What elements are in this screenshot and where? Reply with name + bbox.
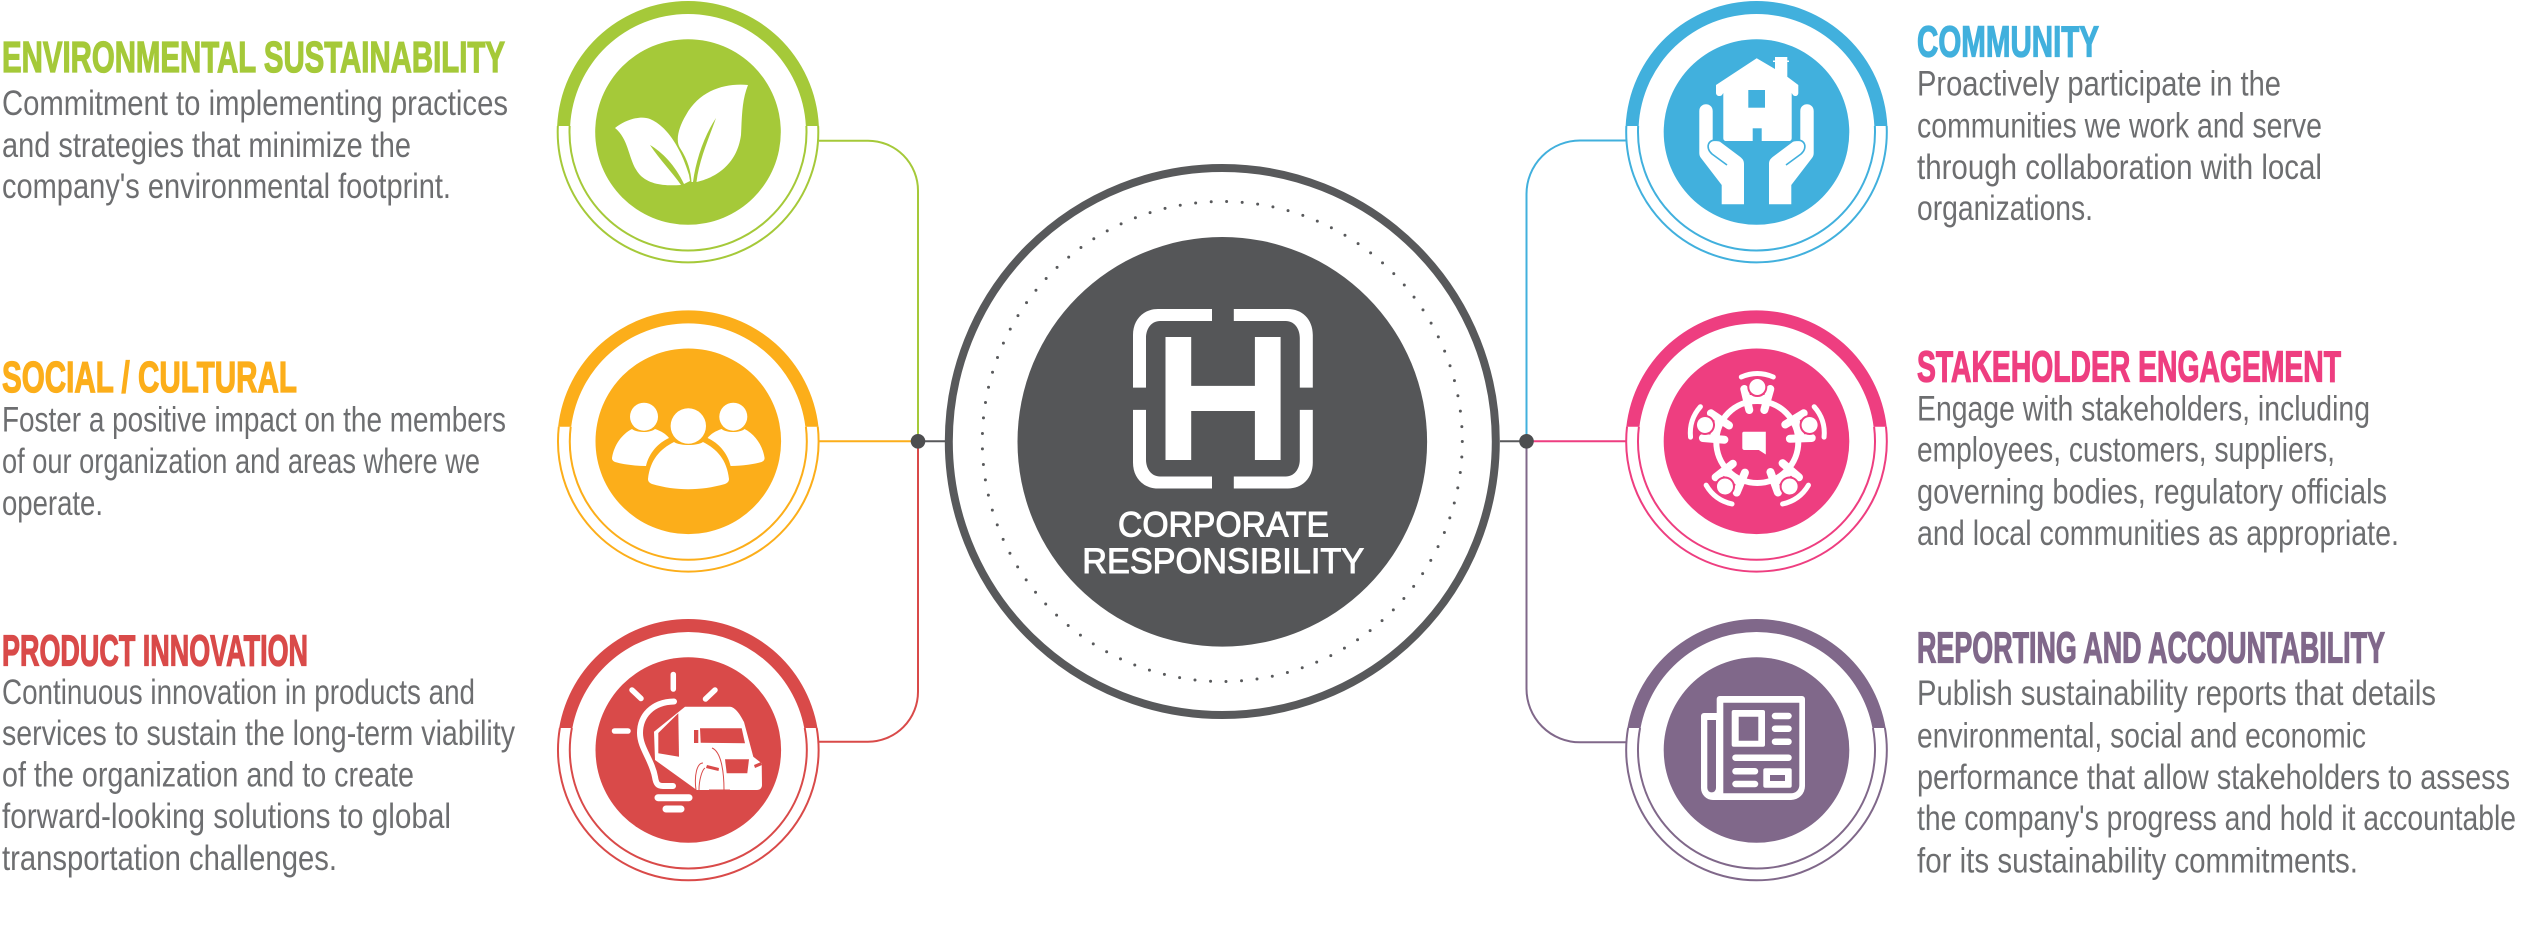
description — [2, 84, 508, 206]
description — [1917, 390, 2399, 553]
description: governing bodies, regulatory officials — [1917, 472, 2387, 511]
ring — [1626, 310, 1887, 572]
description — [2, 673, 515, 878]
icon: meeting around a table — [1687, 374, 1827, 507]
description — [1917, 65, 2322, 228]
ring — [1626, 1, 1887, 262]
description: organizations. — [1917, 189, 2093, 228]
description: through collaboration with local — [1917, 148, 2322, 187]
panel: social / cultural — [2, 310, 819, 572]
description: and local communities as appropriate. — [1917, 514, 2399, 553]
right hub node — [1519, 434, 1534, 449]
ring — [1626, 619, 1887, 880]
description: communities we work and serve — [1917, 106, 2322, 145]
icon: newspaper — [1701, 696, 1805, 800]
logo: H mark — [1133, 309, 1313, 488]
heading: COMMUNITY — [1917, 18, 2099, 67]
description: and strategies that minimize the — [2, 126, 411, 165]
icon: truck in light bulb — [614, 674, 762, 809]
description: forward-looking solutions to global — [2, 797, 451, 836]
connector lines — [819, 140, 1626, 742]
icon: people — [612, 403, 765, 489]
description: Engage with stakeholders, including — [1917, 390, 2370, 429]
description: operate. — [2, 484, 103, 523]
description: environmental, social and economic — [1917, 716, 2366, 755]
description: for its sustainability commitments. — [1917, 841, 2358, 880]
description: Foster a positive impact on the members — [2, 401, 506, 440]
icon: house in hands — [1699, 57, 1814, 204]
panel: community — [1626, 1, 2322, 262]
badge title — [1082, 505, 1364, 581]
central badge — [949, 168, 1496, 715]
description: Continuous innovation in products and — [2, 673, 475, 712]
left hub node — [911, 434, 925, 449]
panel: stakeholder engagement — [1626, 310, 2399, 572]
icon: leaves — [615, 85, 748, 185]
description: services to sustain the long-term viability — [2, 714, 515, 753]
description: company's environmental footprint. — [2, 167, 451, 206]
description: Publish sustainability reports that details — [1917, 674, 2436, 713]
description: employees, customers, suppliers, — [1917, 431, 2335, 470]
heading: SOCIAL / CULTURAL — [2, 353, 297, 402]
badge title: CORPORATE — [1118, 505, 1329, 544]
description — [1917, 674, 2516, 880]
panel: reporting and accountability — [1626, 619, 2516, 880]
badge title: RESPONSIBILITY — [1082, 542, 1364, 581]
description: transportation challenges. — [2, 839, 337, 878]
description: Commitment to implementing practices — [2, 84, 508, 123]
heading: PRODUCT INNOVATION — [2, 627, 308, 676]
outer ring — [949, 168, 1496, 715]
description — [2, 401, 506, 523]
ring — [557, 1, 819, 262]
ring — [558, 619, 819, 880]
centre disc — [1018, 237, 1427, 647]
description: of the organization and to create — [2, 756, 414, 795]
description: of our organization and areas where we — [2, 442, 480, 481]
description: Proactively participate in the — [1917, 65, 2281, 104]
panel: environmental sustainability — [2, 1, 819, 262]
heading: ENVIRONMENTAL SUSTAINABILITY — [2, 33, 505, 82]
panel: product innovation — [2, 619, 819, 880]
dotted ring — [982, 202, 1462, 682]
ring — [558, 310, 819, 572]
